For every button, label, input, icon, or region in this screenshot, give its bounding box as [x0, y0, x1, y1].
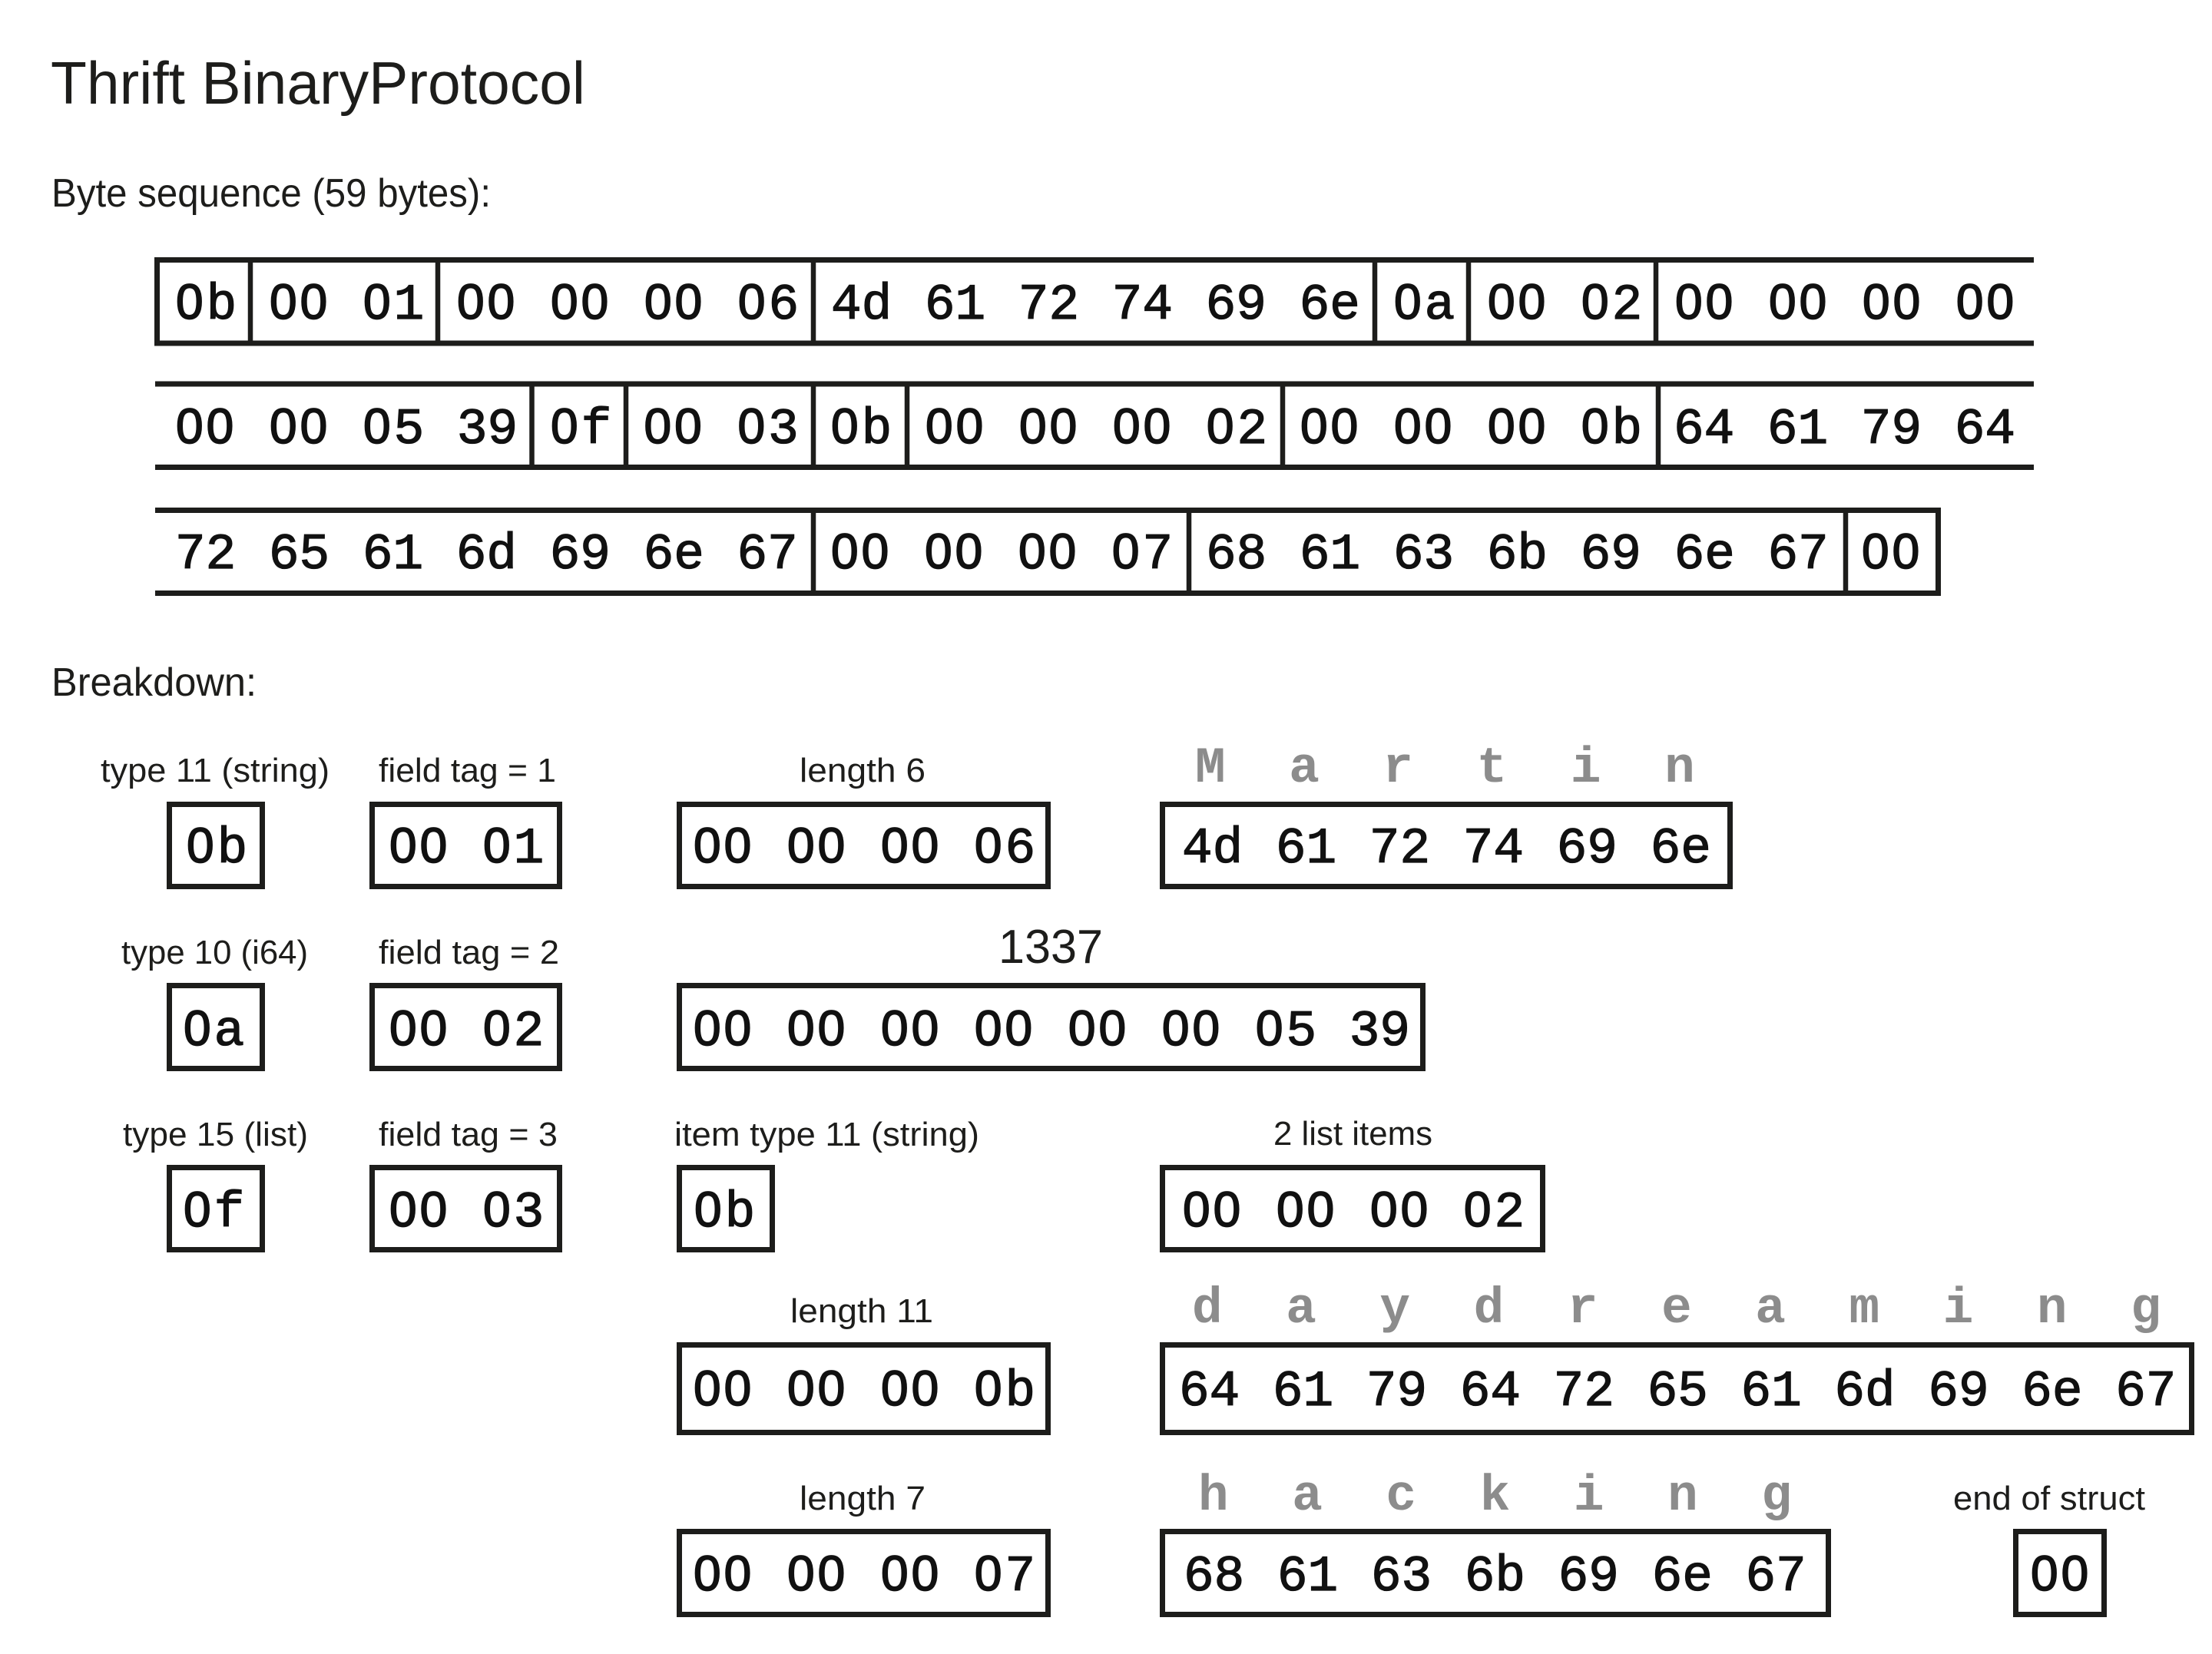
box: length 7 bytes: 00 00 00 07 [694, 1546, 1035, 1606]
box: list count [1163, 1167, 1542, 1250]
box: 0a [169, 986, 263, 1069]
byte row 3: 72 65 61 6d 69 6e 67 [175, 526, 798, 584]
box: Martin bytes [1163, 805, 1730, 886]
label: type 15 list: type 15 (list) [123, 1116, 308, 1153]
box: inner 0b [679, 1167, 773, 1250]
byte row 1: 0b [176, 274, 237, 334]
box: 0b [169, 805, 263, 886]
label: item type 11 string: item type 11 (string) [674, 1116, 979, 1153]
box: 00 02 [372, 986, 559, 1069]
box: 1337 bytes: 00 00 00 00 00 00 05 39 [694, 1001, 1410, 1060]
byte row 1: 00 00 00 06 [457, 274, 799, 334]
gray letters: hacking: h a c k i n g [1198, 1467, 1792, 1525]
box: 1337 bytes [679, 986, 1422, 1069]
byte row 1: 4d 61 72 74 69 6e [831, 276, 1360, 334]
label: length 11: length 11 [790, 1292, 933, 1330]
box: 0f: 0f [184, 1182, 244, 1242]
box: daydreaming bytes: 64 61 79 64 72 65 61 6d 69 6e 67 [1179, 1363, 2176, 1421]
box: hacking bytes: 68 61 63 6b 69 6e 67 [1184, 1548, 1806, 1606]
box: 00 01 [372, 805, 559, 886]
gray letters: daydreaming: d a y d r e a m i n g [1192, 1280, 2161, 1338]
label: field tag 2: field tag = 2 [379, 934, 559, 971]
byte row 2 [155, 384, 2034, 467]
box: daydreaming bytes [1163, 1345, 2192, 1433]
box: end of struct [2015, 1531, 2104, 1614]
box: end of struct: 00 [2031, 1546, 2091, 1601]
box: 00 01: 00 01 [389, 818, 544, 878]
label: end of struct: end of struct [1953, 1480, 2145, 1517]
byte row 2: 0f [551, 399, 611, 458]
label: field tag 1: field tag = 1 [379, 752, 556, 789]
box: length 11 bytes: 00 00 00 0b [694, 1361, 1035, 1421]
byte row 2: 00 00 00 02 [926, 399, 1267, 458]
box: 00 02: 00 02 [389, 1001, 544, 1060]
byte row 2: 00 00 00 0b [1300, 399, 1642, 458]
byte row 2: 00 03 [644, 399, 799, 458]
byte row 1: 00 01 [270, 274, 424, 334]
box: 00 03: 00 03 [389, 1182, 544, 1242]
label: 2 list items: 2 list items [1273, 1115, 1432, 1153]
box: length 11 bytes [679, 1345, 1048, 1433]
byte row 1: 00 02 [1488, 274, 1642, 334]
box: Martin bytes: 4d 61 72 74 69 6e [1182, 820, 1711, 878]
label: field tag 3: field tag = 3 [379, 1116, 558, 1153]
gray letters: Martin: M a r t i n [1195, 739, 1695, 797]
label: type 11 string: type 11 (string) [101, 752, 329, 789]
box: 00 00 00 06 [679, 805, 1048, 886]
box: 00 03 [372, 1167, 559, 1250]
byte row 2: 00 00 05 39 [176, 399, 518, 458]
byte row 3: 00 00 00 07 [831, 524, 1173, 584]
byte row 3: 68 61 63 6b 69 6e 67 [1206, 526, 1829, 584]
byte row 1 [154, 257, 2034, 346]
box: length 7 bytes [679, 1531, 1048, 1614]
label: 1337: 1337 [998, 921, 1103, 974]
title: Thrift BinaryProtocol [51, 49, 585, 117]
heading: byte sequence: Byte sequence (59 bytes): [51, 171, 491, 216]
byte row 1: 0a [1394, 274, 1455, 334]
byte row 2: 0b [831, 399, 892, 458]
box: hacking bytes [1163, 1531, 1828, 1614]
label: length 7: length 7 [800, 1480, 926, 1517]
box: list count: 00 00 00 02 [1183, 1182, 1525, 1242]
label: type 10 i64: type 10 (i64) [121, 934, 308, 971]
byte row 1: 00 00 00 00 [1675, 274, 2017, 334]
byte row 2: 64 61 79 64 [1674, 401, 2015, 458]
box: 0a: 0a [184, 1001, 244, 1060]
label: length 6: length 6 [800, 752, 926, 789]
heading: breakdown: Breakdown: [51, 660, 257, 705]
box: 00 00 00 06: 00 00 00 06 [694, 818, 1035, 878]
box: 0b: 0b [187, 818, 247, 878]
box: inner 0b: 0b [694, 1182, 755, 1242]
box: 0f [169, 1167, 263, 1250]
byte row 3: 00 [1862, 524, 1922, 579]
byte row 3 [155, 508, 1941, 596]
